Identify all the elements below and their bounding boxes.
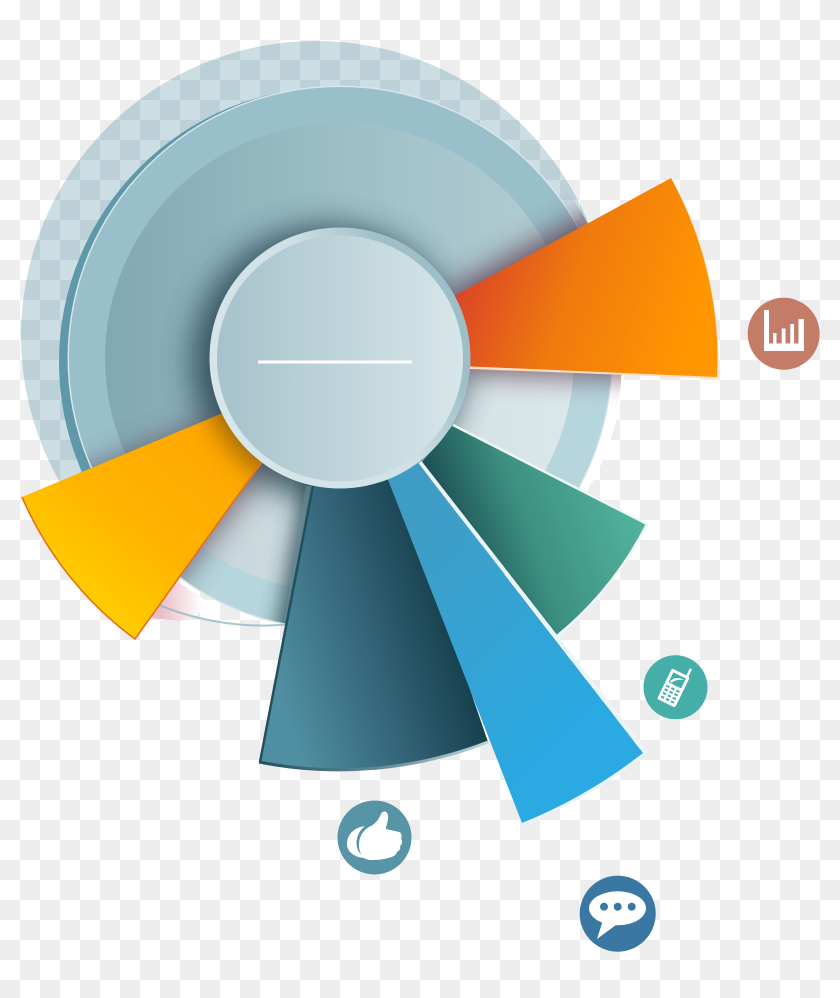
orange slice shadow [442,198,622,400]
teal bottom rim [259,742,488,770]
disc dark crescent edge [59,92,283,472]
outer translucent circle [21,41,611,631]
green light edge [453,425,647,636]
slice: green [422,425,647,636]
slice: yellow [21,414,262,640]
icon: speech bubble [580,876,656,952]
slice: dark teal [259,470,488,770]
icon: bar chart [748,298,820,370]
disc highlight [68,86,612,630]
white halo behind disc [151,375,624,630]
blue white edge [420,462,646,824]
slice: blue [385,462,646,824]
disc outer ring [69,87,611,629]
icon: thumbs up [338,800,412,874]
teal translucent side band [284,486,313,622]
teal left edge [260,486,313,762]
cast shadows on the disc [86,198,622,624]
dark teal slice shadow [264,460,436,624]
icon: mobile phone [644,655,708,719]
hub shadow on yellow [198,414,262,482]
yellow orange edge [22,463,261,639]
hub shadow [192,226,464,498]
hub face [217,236,463,482]
main disc [59,86,612,637]
hub ring [210,228,470,488]
yellow slice shadow [86,410,272,588]
disc lower light sector [160,369,610,627]
hub white line [258,360,412,364]
central hub [210,228,470,488]
slice: orange [447,178,718,379]
disc inner area [105,123,575,593]
orange light rim [448,180,718,379]
